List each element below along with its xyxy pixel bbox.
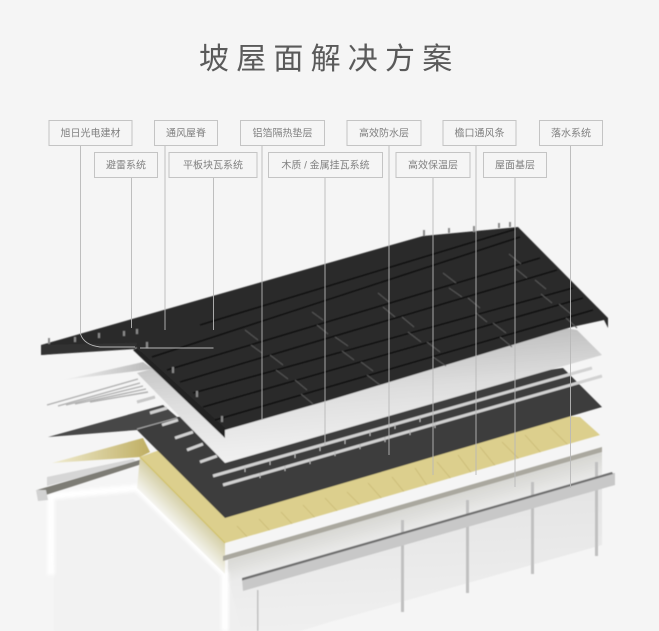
label: 落水系统: 落水系统 <box>551 126 591 140</box>
label: 高效防水层: 高效防水层 <box>359 126 409 140</box>
label: 高效防水层 <box>347 120 421 146</box>
eave ventilation strip <box>223 447 602 561</box>
label: 旭日光电建材 <box>49 120 132 146</box>
left gutter beam <box>36 459 145 501</box>
label: 平板块瓦系统 <box>169 152 257 178</box>
tile roof <box>41 222 608 438</box>
ridge clips <box>49 222 510 422</box>
insulation layer: yellow <box>52 400 600 574</box>
label: 旭日光电建材: 旭日光电建材 <box>60 126 120 140</box>
roof surface <box>41 227 608 438</box>
label: 通风屋脊 <box>154 120 218 146</box>
labels <box>49 120 602 178</box>
waterproof layer: dark sheet <box>48 368 602 518</box>
label: 落水系统 <box>540 120 602 146</box>
ventilation and lightning strips <box>47 379 155 406</box>
title: 坡屋面解决方案 <box>199 43 459 76</box>
label: 避雷系统: 避雷系统 <box>106 158 146 172</box>
label: 铝箔隔热垫层 <box>240 120 324 146</box>
tile joints <box>245 254 577 404</box>
tile row lines <box>152 229 593 420</box>
label: 高效保温层: 高效保温层 <box>408 158 458 172</box>
label: 平板块瓦系统: 平板块瓦系统 <box>183 158 243 172</box>
label: 檐口通风条 <box>443 120 516 146</box>
gable white edge <box>51 488 225 631</box>
label: 屋面基层: 屋面基层 <box>495 158 535 172</box>
label: 屋面基层 <box>484 152 546 178</box>
house wall and structure <box>47 450 602 631</box>
label: 木质 / 金属挂瓦系统: 木质 / 金属挂瓦系统 <box>281 158 370 172</box>
metal gutter and downpipes <box>242 462 615 631</box>
roof illustration <box>36 222 615 631</box>
label: 木质 / 金属挂瓦系统 <box>268 152 382 178</box>
label: 通风屋脊: 通风屋脊 <box>166 126 206 140</box>
leader lines <box>80 145 570 488</box>
aluminium foil layer <box>63 300 602 463</box>
label: 铝箔隔热垫层: 铝箔隔热垫层 <box>252 126 312 140</box>
label: 高效保温层 <box>396 152 470 178</box>
wood or metal battens <box>150 368 602 485</box>
label: 檐口通风条: 檐口通风条 <box>454 126 504 140</box>
label: 避雷系统 <box>94 152 158 178</box>
